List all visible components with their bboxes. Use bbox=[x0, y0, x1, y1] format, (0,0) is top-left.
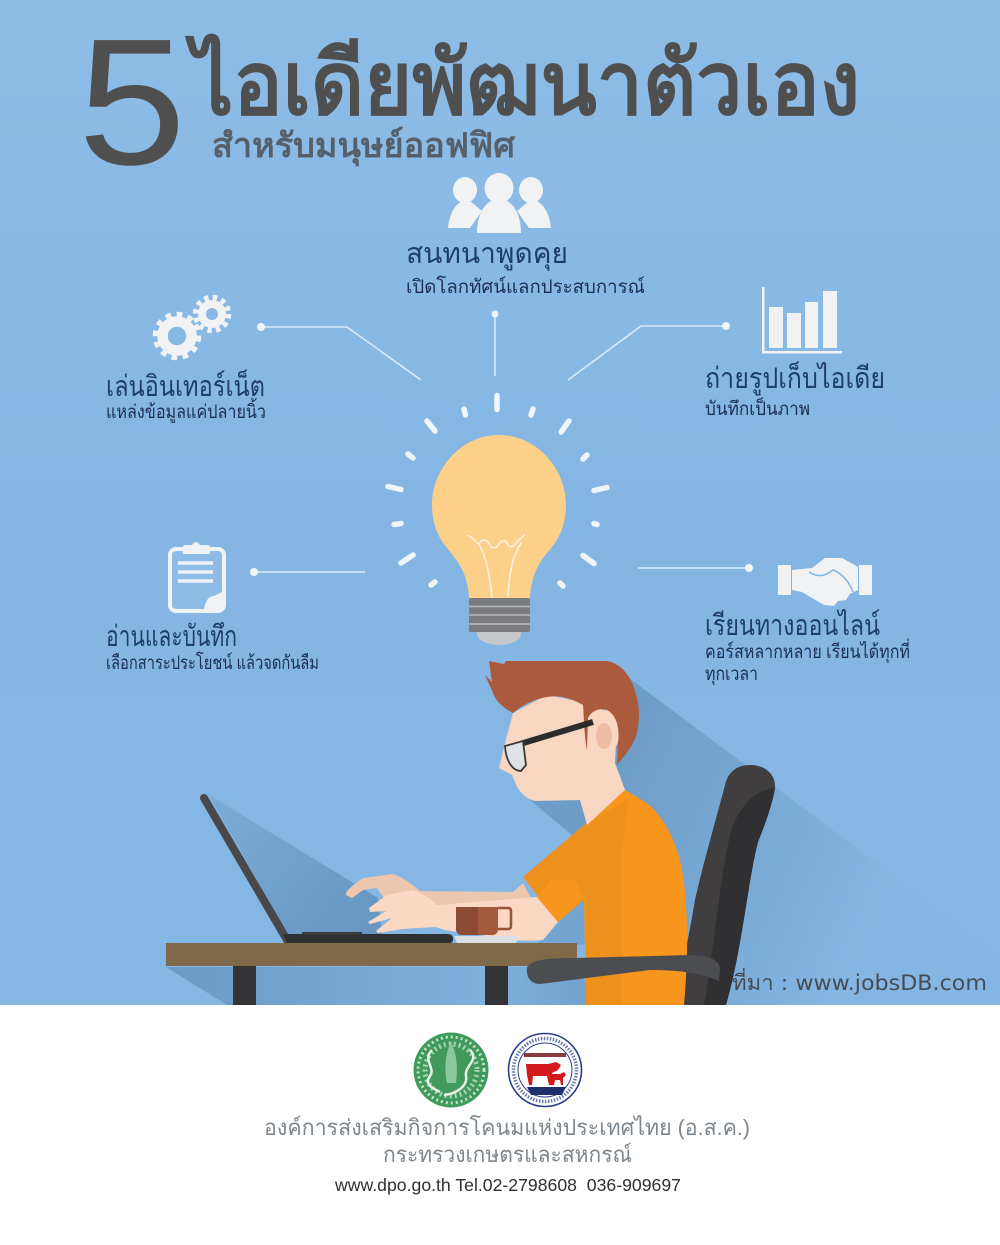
text: photo: ถ่ายรูปเก็บไอเดีย bbox=[705, 360, 885, 396]
text: internet bbox=[106, 368, 266, 423]
connector: top bbox=[492, 310, 498, 376]
icon: people bbox=[448, 173, 551, 233]
footer organisation text: องค์การส่งเสริมกิจการโคนมแห่งประเทศไทย (อ.ส.ค.) bbox=[264, 1115, 750, 1140]
connector: chart bbox=[568, 322, 730, 380]
icon: bar chart bbox=[762, 287, 842, 354]
icon: clipboard bbox=[170, 542, 224, 611]
logo: green seal bbox=[414, 1032, 488, 1108]
text: talk bbox=[406, 238, 645, 298]
neck and face bbox=[499, 695, 625, 825]
text: photo bbox=[705, 360, 885, 420]
text: read: เลือกสาระประโยชน์ แล้วจดกันลืม bbox=[106, 651, 319, 674]
footer organisation text bbox=[264, 1115, 750, 1167]
text: talk: เปิดโลกทัศน์แลกประสบการณ์ bbox=[406, 275, 645, 298]
text: internet: เล่นอินเทอร์เน็ต bbox=[106, 368, 265, 403]
laptop bbox=[204, 798, 453, 943]
footer organisation text: กระทรวงเกษตรและสหกรณ์ bbox=[383, 1142, 632, 1167]
text: internet: แหล่งข้อมูลแค่ปลายนิ้ว bbox=[106, 398, 266, 423]
footer panel bbox=[0, 1005, 1000, 1245]
text: photo: บันทึกเป็นภาพ bbox=[705, 396, 810, 420]
shadow: laptop bbox=[209, 795, 382, 935]
title: สำหรับมนุษย์ออฟฟิศ bbox=[212, 126, 515, 167]
sleeve front bbox=[537, 880, 584, 922]
icon: gears bbox=[156, 298, 228, 358]
shirt bbox=[523, 790, 687, 1005]
text: talk: สนทนาพูดคุย bbox=[406, 238, 568, 271]
text: online: ทุกเวลา bbox=[705, 664, 758, 686]
source credit: ที่มา : www.jobsDB.com bbox=[732, 968, 987, 996]
text: read bbox=[106, 621, 319, 674]
person bbox=[346, 661, 687, 1005]
light bulb rays bbox=[388, 396, 607, 586]
light bulb bbox=[432, 435, 566, 645]
shirt fold bbox=[523, 800, 628, 1005]
text: online: คอร์สหลากหลาย เรียนได้ทุกที่ bbox=[705, 638, 910, 664]
title: ไอเดียพัฒนาตัวเอง bbox=[185, 34, 860, 133]
text: online: เรียนทางออนไลน์ bbox=[705, 608, 880, 642]
icon: handshake bbox=[778, 558, 872, 606]
connector: gears bbox=[257, 323, 421, 380]
shadow: desk bbox=[166, 967, 600, 1005]
front arm and hand bbox=[368, 890, 558, 941]
text: online bbox=[705, 608, 910, 686]
logo: dairy emblem bbox=[508, 1034, 582, 1106]
coffee cup bbox=[454, 907, 519, 943]
title: 5 bbox=[78, 2, 186, 203]
shadow: behind arm bbox=[538, 898, 588, 945]
title bbox=[78, 2, 860, 203]
footer contact: www.dpo.go.th Tel.02-2798608 036-909697 bbox=[334, 1175, 681, 1195]
glasses bbox=[505, 722, 593, 771]
chair back bbox=[674, 765, 775, 1005]
desk bbox=[166, 943, 577, 1005]
connector: clipboard bbox=[250, 568, 365, 576]
ear bbox=[594, 710, 620, 752]
hair bbox=[485, 661, 639, 765]
text: read: อ่านและบันทึก bbox=[106, 621, 237, 653]
shadow: person bbox=[530, 672, 1000, 1005]
connector: handshake bbox=[638, 564, 753, 572]
chair armrest bbox=[527, 955, 720, 984]
back arm bbox=[346, 874, 534, 905]
